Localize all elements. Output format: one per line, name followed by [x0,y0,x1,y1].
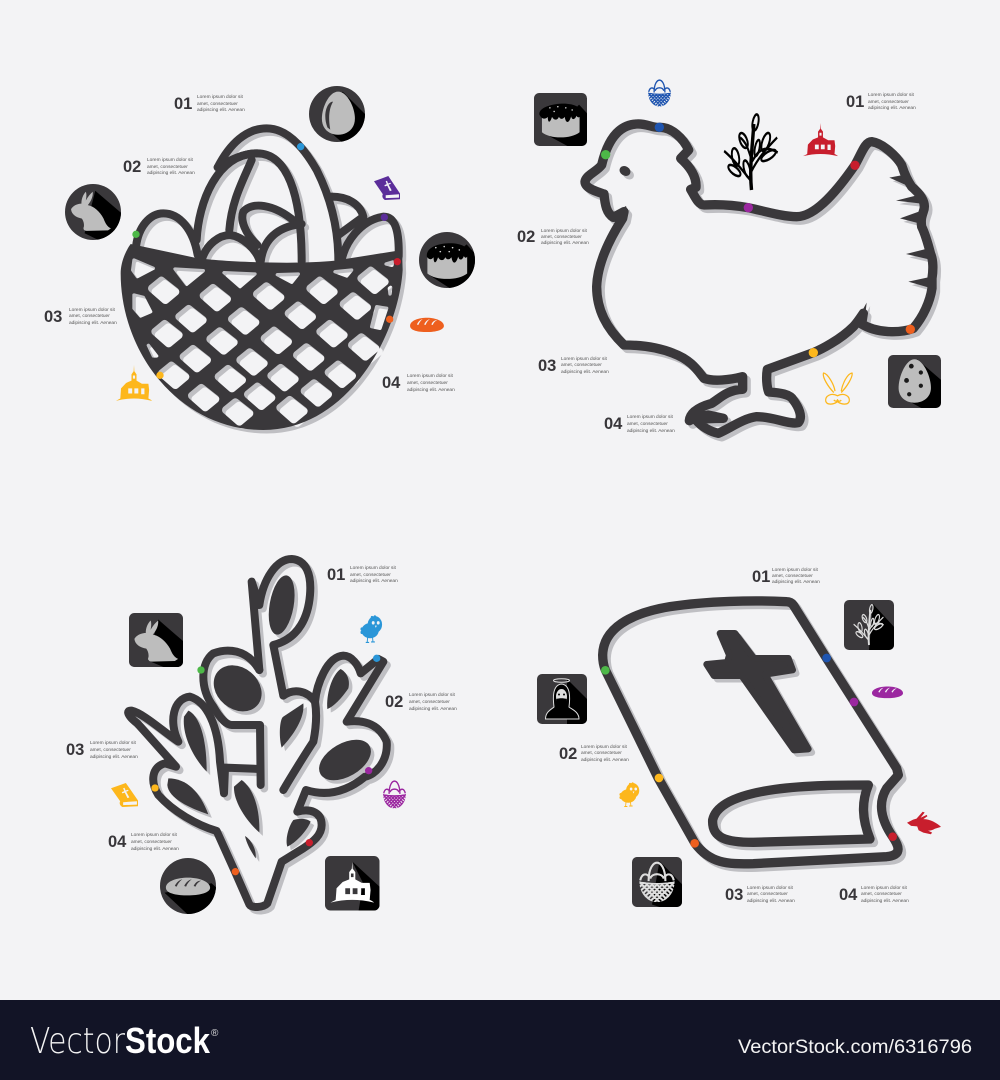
step 01 [846,92,916,111]
icon: saint badge [537,674,587,724]
icon: basket badge [632,857,682,907]
step 01: 01 [174,95,192,113]
step 03 [44,307,117,326]
step 01: amet, consectetuer [868,99,909,105]
step 02 [559,744,629,763]
step 02: adipiscing elit. Aenean [147,170,195,176]
step 04: amet, consectetuer [131,839,172,845]
step 02 [385,692,457,712]
step 02: 02 [123,158,141,176]
step 02 [123,157,195,176]
panel: basket infographic [44,86,486,433]
step 03: amet, consectetuer [561,362,602,368]
colored dots on basket [132,143,401,379]
step 03: Lorem ipsum dolor sit [90,740,137,746]
step 03 [66,740,138,760]
panel: willow branch infographic [66,559,457,925]
icon: purple bread [872,686,903,698]
icon: church badge [325,856,380,910]
willow branch outline and buds [128,559,390,910]
step 04: Lorem ipsum dolor sit [407,373,454,379]
icon: red church [803,123,838,156]
step 02: amet, consectetuer [541,234,582,240]
icon: speckled egg badge [888,355,941,408]
panel: bible infographic [537,567,941,914]
icon: rabbit badge [129,613,183,667]
basket outline [121,128,406,433]
step 02: adipiscing elit. Aenean [409,706,457,712]
step 02: adipiscing elit. Aenean [541,240,589,246]
icon: yellow church [116,365,152,401]
registered mark: ® [211,1028,219,1039]
step 01: 01 [327,566,345,584]
step 03: adipiscing elit. Aenean [90,754,138,760]
step 02 [517,228,589,246]
logo: Vector [30,1021,125,1062]
step 01: adipiscing elit. Aenean [868,105,916,111]
step 01: Lorem ipsum dolor sit [868,92,915,98]
step 03 [538,356,609,375]
image url: VectorStock.com/6316796 [738,1037,972,1058]
step 01: adipiscing elit. Aenean [197,107,245,113]
hen outline [585,124,936,437]
step 02: 02 [517,228,535,246]
step 04 [382,373,455,393]
step 02: adipiscing elit. Aenean [581,757,629,763]
step 03: adipiscing elit. Aenean [747,898,795,904]
step 02: amet, consectetuer [409,699,450,705]
step 01 [327,565,398,584]
step 03 [725,885,795,904]
step 03: adipiscing elit. Aenean [69,320,117,326]
step 01: 01 [846,93,864,111]
icon: cake badge [419,232,475,288]
icon: purple basket [372,781,417,812]
step 04: adipiscing elit. Aenean [627,428,675,434]
step 04: amet, consectetuer [627,421,668,427]
step 03: Lorem ipsum dolor sit [561,356,608,362]
icon: egg badge [309,86,365,142]
icon: yellow book [111,783,138,807]
icon: orange bread [410,318,444,332]
logo bold part: Stock [125,1020,211,1061]
step 02: Lorem ipsum dolor sit [147,157,194,163]
step 01: amet, consectetuer [772,573,813,579]
step 02: 02 [559,745,577,763]
step 04 [839,885,909,904]
step 01: 01 [752,568,770,586]
step 02: Lorem ipsum dolor sit [409,692,456,698]
step 03: 03 [538,357,556,375]
icon: yellow chick [619,782,639,806]
icon: bread badge [160,858,216,914]
colored dots on branch [151,655,380,875]
step 01: amet, consectetuer [197,101,238,107]
icon: purple book [374,176,400,200]
icon: blue basket [637,80,682,110]
step 04: 04 [839,886,858,904]
step 03: adipiscing elit. Aenean [561,369,609,375]
step 04: adipiscing elit. Aenean [131,846,179,852]
footer bar [0,1000,1000,1080]
icon: red rabbit [907,812,941,834]
step 04: 04 [604,415,623,433]
step 01: adipiscing elit. Aenean [350,578,398,584]
step 04: adipiscing elit. Aenean [407,387,455,393]
step 04: 04 [108,833,127,851]
step 03: Lorem ipsum dolor sit [69,307,116,313]
step 03: 03 [725,886,743,904]
step 01 [752,567,820,586]
step 02: 02 [385,693,403,711]
step 01: Lorem ipsum dolor sit [772,567,819,573]
step 03: 03 [44,308,62,326]
icon: rabbit badge [65,184,121,240]
icon: yellow bunny face [823,373,852,404]
step 02: amet, consectetuer [147,164,188,170]
step 03: amet, consectetuer [69,313,110,319]
icon: cake badge [534,93,587,146]
step 01 [174,94,245,113]
step 02: amet, consectetuer [581,750,622,756]
step 03: amet, consectetuer [90,747,131,753]
panel: hen infographic [517,80,949,437]
step 01: Lorem ipsum dolor sit [350,565,397,571]
step 01: adipiscing elit. Aenean [772,579,820,585]
colored dots on hen [601,123,915,357]
step 04 [108,832,179,852]
step 04: amet, consectetuer [861,891,902,897]
step 01: amet, consectetuer [350,572,391,578]
step 04: amet, consectetuer [407,380,448,386]
bible outline and cross [603,601,902,867]
step 04: Lorem ipsum dolor sit [861,885,908,891]
step 01: Lorem ipsum dolor sit [197,94,244,100]
icon: black willow [724,114,778,190]
step 04: 04 [382,374,401,392]
step 02: Lorem ipsum dolor sit [541,228,588,234]
step 04: adipiscing elit. Aenean [861,898,909,904]
step 04 [604,414,675,434]
icon: blue chick [360,615,382,642]
step 03: Lorem ipsum dolor sit [747,885,794,891]
icon: willow badge [844,600,894,650]
step 04: Lorem ipsum dolor sit [627,414,674,420]
colored dots on bible [601,654,897,848]
step 03: 03 [66,741,84,759]
step 04: Lorem ipsum dolor sit [131,832,178,838]
step 03: amet, consectetuer [747,891,788,897]
step 02: Lorem ipsum dolor sit [581,744,628,750]
